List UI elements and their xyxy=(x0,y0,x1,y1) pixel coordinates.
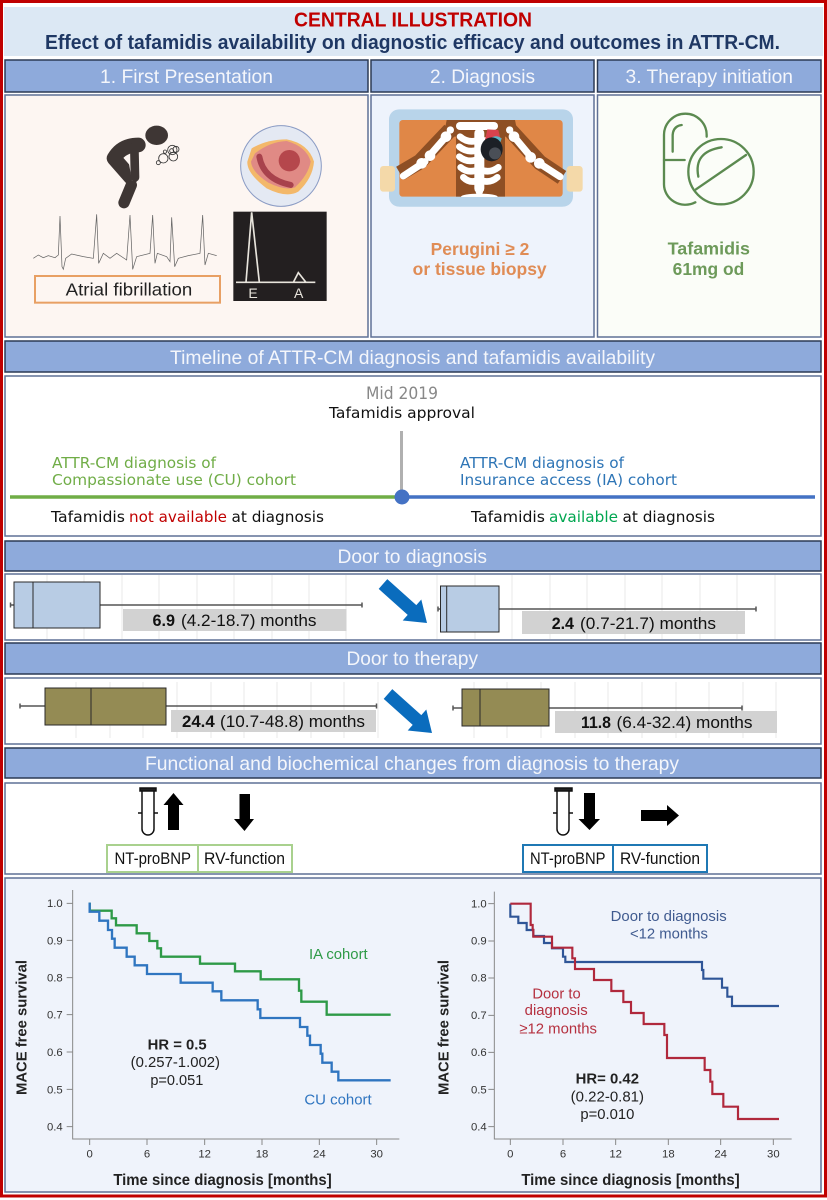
icon: test tube left xyxy=(138,788,158,835)
chart: MACE by cohort: 0.8 xyxy=(47,973,63,985)
chart: MACE by door to diagnosis xyxy=(437,892,792,1189)
IA cohort label: Insurance access (IA) cohort xyxy=(460,471,677,489)
hazard ratio text: (0.257-1.002) xyxy=(131,1055,220,1071)
tafamidis not available note: not available xyxy=(129,508,227,526)
value label: 2.4 months: 2.4 xyxy=(552,614,575,633)
title block xyxy=(4,7,823,56)
chart: MACE by door to diagnosis: 0 xyxy=(507,1149,513,1161)
biomarker labels: IA cohort xyxy=(523,845,707,872)
doppler E/A chart: E xyxy=(248,285,258,301)
chart: MACE by cohort: 30 xyxy=(370,1149,383,1161)
timeline axis xyxy=(10,431,815,504)
tafamidis available note: at diagnosis xyxy=(622,508,715,526)
doppler E/A chart xyxy=(233,212,327,301)
title block: Effect of tafamidis availability on diagnostic efficacy and outcomes in ATTR-CM. xyxy=(45,31,780,54)
arrow: RV-function unchanged xyxy=(641,805,679,826)
arrow: RV-function down xyxy=(234,794,254,831)
chart: MACE by door to diagnosis: 6 xyxy=(560,1149,566,1161)
chart: MACE by door to diagnosis: 24 xyxy=(714,1149,727,1161)
heading: timeline xyxy=(5,341,821,372)
value label: 11.8 months: 11.8 xyxy=(581,713,611,732)
tafamidis not available note: Tafamidis xyxy=(50,508,125,526)
therapy text: 61mg od xyxy=(673,259,744,279)
biomarker labels: CU cohort: NT-proBNP xyxy=(114,850,191,868)
biomarker labels: CU cohort xyxy=(107,845,292,872)
boxplot: CU door to therapy xyxy=(20,682,378,738)
heading: 3. Therapy initiation: 3. Therapy initiation xyxy=(626,66,793,88)
tafamidis available note xyxy=(470,508,715,526)
chart: MACE by door to diagnosis: 0.5 xyxy=(471,1084,487,1096)
value label: 6.9 months: (4.2-18.7) months xyxy=(181,611,316,630)
atrial fibrillation label xyxy=(35,276,220,303)
heading: 3. Therapy initiation xyxy=(598,60,821,92)
value label: 24.4 months: 24.4 xyxy=(182,712,215,731)
curve label: CU cohort: CU cohort xyxy=(304,1091,372,1108)
doppler E/A chart: A xyxy=(294,285,304,301)
chart: MACE by cohort: 18 xyxy=(256,1149,268,1161)
heading: functional and biochemical changes xyxy=(5,748,821,778)
chart: MACE by cohort: 0.6 xyxy=(47,1047,63,1059)
chart: MACE by cohort: 0.7 xyxy=(47,1010,63,1022)
curve label: IA cohort: IA cohort xyxy=(309,946,368,963)
arrow: NT-proBNP up xyxy=(164,793,184,830)
tafamidis not available note xyxy=(50,508,324,526)
boxplot: CU door to diagnosis xyxy=(10,575,362,639)
chart: MACE by door to diagnosis: 0.7 xyxy=(471,1010,487,1022)
biomarker labels: IA cohort: RV-function xyxy=(620,850,700,868)
heading: 1. First Presentation: 1. First Presentation xyxy=(100,66,273,88)
icon: heart cross-section xyxy=(241,126,321,206)
curve label: 12 months or more: ≥12 months xyxy=(519,1020,597,1037)
chart: MACE by cohort: MACE free survival xyxy=(15,960,31,1095)
heading: 2. Diagnosis xyxy=(371,60,594,92)
heading: functional and biochemical changes: Functional and biochemical changes from diagnosis to therapy xyxy=(145,753,679,775)
arrow: improvement in door to therapy xyxy=(384,689,432,733)
chart: MACE by door to diagnosis: 0.8 xyxy=(471,973,487,985)
icon: chest x-ray with skeleton xyxy=(380,109,583,207)
chart: MACE by cohort: 0.5 xyxy=(47,1084,63,1096)
diagnosis criteria text: or tissue biopsy xyxy=(413,259,547,279)
value label: 24.4 months: (10.7-48.8) months xyxy=(220,712,365,731)
chart: MACE by door to diagnosis: Time since diagnosis [months] xyxy=(521,1172,740,1189)
diagnosis criteria text xyxy=(413,239,547,279)
chart: MACE by door to diagnosis: 0.6 xyxy=(471,1047,487,1059)
panel: therapy initiation xyxy=(598,95,821,337)
diagnosis criteria text: Perugini ≥ 2 xyxy=(431,239,529,259)
curve label: under 12 months xyxy=(611,908,727,942)
biomarker labels: CU cohort: RV-function xyxy=(204,850,285,868)
heading: door to therapy xyxy=(5,643,821,674)
approval label xyxy=(328,384,475,422)
curve label: under 12 months: Door to diagnosis xyxy=(611,908,727,925)
tafamidis not available note: at diagnosis xyxy=(232,508,324,526)
chart: MACE by cohort: 1.0 xyxy=(47,898,63,910)
curve: door to diagnosis 12 months or more xyxy=(510,904,779,1119)
heading: 2. Diagnosis: 2. Diagnosis xyxy=(430,66,535,88)
chart: MACE by cohort: 24 xyxy=(313,1149,326,1161)
panel: door to therapy xyxy=(5,678,821,744)
IA cohort label: ATTR-CM diagnosis of xyxy=(460,454,625,472)
boxplot: IA door to therapy xyxy=(453,682,776,738)
ECG trace xyxy=(33,214,217,269)
chart: MACE by door to diagnosis: 18 xyxy=(662,1149,675,1161)
curve: door to diagnosis under 12 months xyxy=(510,904,779,1006)
curve: CU cohort xyxy=(90,903,391,1080)
chart: MACE by cohort: 12 xyxy=(198,1149,211,1161)
CU cohort label: ATTR-CM diagnosis of xyxy=(52,454,217,472)
chart: MACE by cohort xyxy=(15,890,399,1189)
hazard ratio text xyxy=(131,1037,220,1089)
panel: timeline xyxy=(5,376,821,536)
chart: MACE by cohort: Time since diagnosis [months] xyxy=(113,1172,332,1189)
chart: MACE by door to diagnosis: 12 xyxy=(609,1149,622,1161)
value label: 6.9 months xyxy=(123,609,346,631)
panel: door to diagnosis xyxy=(5,574,821,640)
heading: 1. First Presentation xyxy=(5,60,368,92)
value label: 6.9 months: 6.9 xyxy=(152,611,175,630)
hazard ratio text: HR = 0.5 xyxy=(148,1037,207,1053)
panel: functional and biochemical changes xyxy=(5,783,821,874)
therapy text xyxy=(668,238,750,279)
tafamidis available note: available xyxy=(549,508,618,526)
arrow: NT-proBNP down xyxy=(578,793,600,830)
curve label: 12 months or more: Door to xyxy=(532,985,581,1002)
curve label: 12 months or more xyxy=(519,985,597,1037)
arrow: improvement in door to diagnosis xyxy=(379,579,427,623)
atrial fibrillation label: Atrial fibrillation xyxy=(66,280,192,300)
heading: door to therapy: Door to therapy xyxy=(346,648,478,670)
chart: MACE by cohort: 0.9 xyxy=(47,935,63,947)
chart: MACE by door to diagnosis: 1.0 xyxy=(471,898,487,910)
value label: 24.4 months xyxy=(171,710,376,732)
CU cohort label: Compassionate use (CU) cohort xyxy=(52,471,296,489)
chart: MACE by door to diagnosis: 30 xyxy=(767,1149,780,1161)
icon: coughing person xyxy=(114,126,179,203)
chart: MACE by cohort: 0 xyxy=(87,1149,93,1161)
heading: door to diagnosis xyxy=(5,541,821,571)
chart: MACE by door to diagnosis: 0.9 xyxy=(471,936,487,948)
icon: test tube right xyxy=(553,788,573,835)
heading: timeline: Timeline of ATTR-CM diagnosis and tafamidis availability xyxy=(170,347,655,369)
therapy text: Tafamidis xyxy=(668,238,750,258)
icon: capsule and tablet xyxy=(664,114,754,205)
chart: MACE by door to diagnosis: MACE free survival xyxy=(437,960,453,1095)
approval label: Tafamidis approval xyxy=(328,404,475,422)
value label: 11.8 months: (6.4-32.4) months xyxy=(616,713,752,732)
CU cohort label xyxy=(52,454,296,489)
value label: 2.4 months xyxy=(522,611,745,634)
panel: diagnosis xyxy=(371,95,594,337)
curve label: under 12 months: <12 months xyxy=(630,925,708,942)
value label: 11.8 months xyxy=(555,711,777,733)
hazard ratio text: p=0.010 xyxy=(580,1107,634,1123)
panel: first presentation xyxy=(5,95,368,337)
heading: door to diagnosis: Door to diagnosis xyxy=(338,546,487,568)
chart: MACE by cohort: 6 xyxy=(144,1149,150,1161)
tafamidis available note: Tafamidis xyxy=(470,508,545,526)
hazard ratio text: (0.22-0.81) xyxy=(571,1089,644,1105)
panel: survival curves xyxy=(5,878,821,1192)
hazard ratio text xyxy=(571,1072,644,1123)
chart: MACE by door to diagnosis: 0.4 xyxy=(471,1121,487,1133)
boxplot: IA door to diagnosis xyxy=(437,575,775,639)
IA cohort label xyxy=(460,454,677,489)
curve: IA cohort xyxy=(90,903,391,1015)
biomarker labels: IA cohort: NT-proBNP xyxy=(530,850,606,868)
title block: CENTRAL ILLUSTRATION xyxy=(294,8,532,32)
hazard ratio text: p=0.051 xyxy=(150,1073,203,1089)
value label: 2.4 months: (0.7-21.7) months xyxy=(580,614,716,633)
chart: MACE by cohort: 0.4 xyxy=(47,1122,63,1134)
approval label: Mid 2019 xyxy=(366,384,438,404)
hazard ratio text: HR= 0.42 xyxy=(576,1072,639,1088)
curve label: 12 months or more: diagnosis xyxy=(525,1002,588,1019)
